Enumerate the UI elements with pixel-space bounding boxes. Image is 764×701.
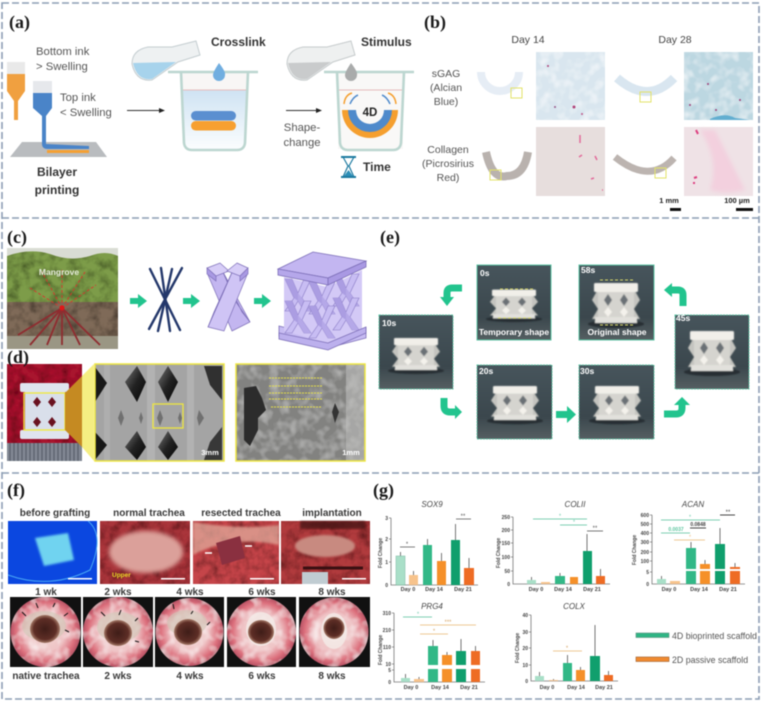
panel f label: (f) bbox=[7, 480, 25, 501]
frame 45s bbox=[675, 313, 749, 389]
chart ACAN: 600 bbox=[641, 513, 649, 519]
bottom ink text: Bottom ink bbox=[36, 46, 90, 58]
chart SOX9 bbox=[378, 500, 478, 593]
panel f: in vivo trachea bbox=[7, 480, 370, 682]
chart PRG4: PRG4 bbox=[421, 602, 443, 611]
arrow 10s to 20s bbox=[444, 398, 462, 419]
bilayer printing label bbox=[35, 165, 79, 197]
chart ACAN: 0 bbox=[646, 582, 649, 588]
column headings bbox=[20, 508, 362, 519]
chart COLII: Day 21 bbox=[583, 587, 601, 593]
chart ACAN: 200 bbox=[641, 550, 649, 556]
chart COLX: Day 14 bbox=[567, 685, 586, 691]
column headings: normal trachea bbox=[113, 508, 185, 519]
endoscopy native trachea bbox=[10, 597, 81, 667]
arrow 20s to 30s bbox=[556, 406, 576, 423]
magnified surface image bbox=[236, 364, 365, 461]
3D lattice scaffold bbox=[278, 252, 366, 350]
frame 0s bbox=[477, 265, 551, 340]
chart PRG4: Day 14 bbox=[431, 685, 450, 691]
hourglass icon bbox=[341, 157, 356, 177]
bottom ink text: > Swelling bbox=[36, 61, 88, 73]
chart COLII: 250 bbox=[502, 515, 510, 521]
chart PRG4 bbox=[378, 602, 485, 691]
frame 10s: 10s bbox=[382, 318, 396, 328]
100 um scale bar: 100 µm bbox=[724, 196, 750, 205]
week labels row 2: 6 wks bbox=[248, 671, 276, 682]
chart SOX9: Day 14 bbox=[425, 587, 444, 593]
chart SOX9: 2 bbox=[385, 537, 388, 543]
chart COLII: 150 bbox=[502, 541, 510, 547]
chart ACAN: 5 bbox=[646, 570, 649, 576]
panel e: shape recovery sequence bbox=[379, 227, 749, 439]
micro CT image: 3mm bbox=[201, 448, 219, 457]
arrow 1 bbox=[130, 294, 147, 308]
chart PRG4: *** bbox=[444, 620, 452, 626]
crosslink label: Crosslink bbox=[211, 35, 266, 49]
chart COLII: * bbox=[559, 514, 562, 520]
frame 58s: Original shape bbox=[587, 327, 647, 337]
frame 20s: 20s bbox=[479, 366, 493, 376]
grey liquid flask bbox=[287, 41, 355, 80]
week labels row 1: 2 wks bbox=[104, 587, 132, 598]
chart COLII: 100 bbox=[502, 555, 510, 561]
3D strut unit bbox=[207, 263, 250, 331]
frame 58s: 58s bbox=[581, 265, 595, 275]
endoscopy 4 wks bbox=[155, 597, 224, 667]
chart COLX: 20 bbox=[522, 646, 528, 652]
collagen row label: Collagen bbox=[427, 144, 469, 156]
photo normal trachea: Upper bbox=[112, 572, 131, 579]
arrow 0s to 10s bbox=[440, 288, 462, 306]
bilayer printing label: Bilayer bbox=[37, 165, 77, 179]
chart ACAN: Day 0 bbox=[662, 587, 676, 593]
week labels row 2: 4 wks bbox=[176, 671, 204, 682]
frame 45s: 45s bbox=[676, 313, 690, 323]
magnified surface image: 1mm bbox=[342, 448, 360, 457]
arrow to crosslink bbox=[127, 108, 165, 113]
legend 2D passive: 2D passive scaffold bbox=[672, 655, 748, 665]
panel g label: (g) bbox=[373, 480, 394, 501]
collagen row label: Red) bbox=[437, 172, 459, 184]
top ink text bbox=[60, 92, 112, 119]
chart COLII: Fold Change bbox=[496, 538, 502, 568]
crosslink droplet bbox=[213, 63, 225, 81]
sGAG day 28 micrograph bbox=[684, 52, 753, 120]
panel a label: (a) bbox=[9, 12, 30, 33]
chart PRG4: 5 bbox=[388, 668, 391, 674]
week labels row 1: 6 wks bbox=[248, 587, 276, 598]
chart SOX9: * bbox=[406, 542, 409, 548]
chart PRG4: Fold Change bbox=[378, 635, 384, 665]
day 28 heading: Day 28 bbox=[658, 34, 692, 46]
chart ACAN: Day 21 bbox=[719, 587, 737, 593]
week labels row 2: 8 wks bbox=[318, 671, 346, 682]
chart COLII: ** bbox=[593, 526, 598, 532]
week labels row 2: 2 wks bbox=[104, 671, 132, 682]
sGAG row label: sGAG bbox=[432, 68, 460, 80]
chart SOX9: 3 bbox=[385, 516, 388, 522]
panel e label: (e) bbox=[380, 227, 400, 248]
arrow 2 bbox=[183, 294, 200, 308]
photo normal trachea bbox=[100, 521, 190, 584]
panel c: mangrove inspired design bbox=[7, 227, 366, 350]
chart ACAN: 300 bbox=[641, 540, 649, 546]
collagen day 14 micrograph bbox=[536, 127, 605, 196]
chart SOX9: SOX9 bbox=[421, 500, 443, 509]
chart SOX9: 1 bbox=[385, 560, 388, 566]
chart ACAN: Day 14 bbox=[690, 587, 709, 593]
frame 0s: 0s bbox=[480, 268, 490, 278]
stimulus droplet bbox=[345, 63, 357, 81]
legend 4D bioprinted: 4D bioprinted scaffold bbox=[672, 631, 757, 641]
branching rod icon bbox=[149, 268, 182, 331]
sGAG row label: (Alcian bbox=[430, 82, 462, 94]
chart SOX9: Day 21 bbox=[454, 587, 472, 593]
arrow 30s to 45s bbox=[664, 397, 690, 414]
micro CT image bbox=[95, 364, 224, 461]
chart ACAN: 0.0848 bbox=[690, 522, 706, 528]
chart COLX: 10 bbox=[522, 663, 528, 669]
chart COLX: Day 0 bbox=[540, 685, 554, 691]
100 um scale bar bbox=[724, 196, 753, 211]
chart PRG4: * bbox=[417, 612, 420, 618]
chart PRG4: Day 21 bbox=[460, 685, 478, 691]
top ink text: Top ink bbox=[60, 92, 96, 104]
frame 30s: 30s bbox=[580, 366, 594, 376]
zoom wedge bbox=[65, 364, 94, 461]
chart ACAN bbox=[632, 500, 745, 593]
chart PRG4: 0 bbox=[388, 680, 391, 686]
frame 10s bbox=[379, 315, 453, 389]
endoscopy 2 wks bbox=[83, 597, 153, 667]
print platform bbox=[10, 142, 107, 157]
column headings: implantation bbox=[302, 508, 362, 519]
orange ink syringe bbox=[7, 62, 25, 120]
chart COLX: COLX bbox=[563, 602, 586, 611]
photo implantation bbox=[281, 521, 370, 584]
column headings: before grafting bbox=[20, 508, 90, 519]
endoscopy 6 wks bbox=[227, 597, 296, 667]
chart COLII: Day 0 bbox=[529, 587, 543, 593]
panel g: gene expression charts bbox=[373, 480, 757, 691]
frame 0s: Temporary shape bbox=[479, 327, 549, 337]
sGAG row label: Blue) bbox=[434, 96, 458, 108]
chart SOX9: Day 0 bbox=[401, 587, 415, 593]
collagen day 14 arc bbox=[486, 152, 528, 180]
sGAG row label bbox=[430, 68, 462, 108]
chart ACAN: * bbox=[689, 535, 692, 541]
chart ACAN: * bbox=[689, 515, 692, 521]
stimulus label: Stimulus bbox=[361, 35, 412, 49]
chart ACAN: 0.0037 bbox=[668, 527, 684, 533]
chart COLII: COLII bbox=[565, 500, 586, 509]
chart COLII: 0 bbox=[507, 582, 510, 588]
panel b: histology bbox=[422, 12, 753, 211]
chart PRG4: 310 bbox=[383, 611, 391, 617]
chart COLX: Day 21 bbox=[595, 685, 613, 691]
column headings: resected trachea bbox=[201, 508, 281, 519]
chart COLX: Fold Change bbox=[515, 633, 521, 663]
chart COLII: 200 bbox=[502, 528, 510, 534]
week labels row 1: 4 wks bbox=[176, 587, 204, 598]
chart PRG4: Day 0 bbox=[404, 685, 418, 691]
panel d label: (d) bbox=[7, 347, 29, 368]
blue liquid flask bbox=[132, 41, 200, 80]
week labels row 1: 1 wk bbox=[35, 587, 57, 598]
crosslink beaker bbox=[168, 72, 258, 150]
sGAG day 28 arc bbox=[617, 78, 674, 102]
chart PRG4: * bbox=[433, 629, 436, 635]
week labels row 2: native trachea bbox=[12, 671, 80, 682]
chart PRG4: 210 bbox=[383, 628, 391, 634]
chart COLX: 40 bbox=[522, 613, 528, 619]
chart ACAN: 500 bbox=[641, 522, 649, 528]
frame 20s bbox=[477, 365, 552, 439]
1 mm scale bar: 1 mm bbox=[659, 196, 679, 205]
panel b label: (b) bbox=[424, 12, 446, 33]
chart ACAN: Fold Change bbox=[632, 535, 638, 565]
shape-change label bbox=[283, 122, 321, 149]
legend bbox=[636, 631, 757, 665]
stimulus beaker with 4D ring bbox=[324, 72, 414, 150]
chart COLII: 50 bbox=[504, 569, 510, 575]
collagen row label: (Picrosirius bbox=[422, 158, 474, 170]
chart COLII: * bbox=[573, 520, 576, 526]
panel c label: (c) bbox=[7, 227, 27, 248]
mangrove photo: Mangrove bbox=[39, 267, 79, 277]
chart COLII: Day 14 bbox=[554, 587, 573, 593]
time label: Time bbox=[363, 160, 391, 174]
chart SOX9: ** bbox=[461, 514, 466, 520]
arrow 3 bbox=[254, 294, 271, 308]
arrow 45s to 58s bbox=[664, 283, 683, 306]
chart SOX9: 0 bbox=[385, 583, 388, 589]
printed scaffold photo bbox=[7, 364, 82, 461]
chart COLX: * bbox=[566, 646, 569, 652]
chart ACAN: 400 bbox=[641, 531, 649, 537]
chart COLX: 30 bbox=[522, 630, 528, 636]
frame 58s bbox=[579, 265, 654, 340]
chart COLX: 0 bbox=[525, 679, 528, 685]
collagen day 28 micrograph bbox=[684, 127, 753, 196]
chart COLX bbox=[515, 602, 618, 691]
chart SOX9: Fold Change bbox=[378, 538, 384, 568]
chart PRG4: 10 bbox=[385, 662, 391, 668]
photo before grafting bbox=[8, 521, 97, 584]
chart PRG4: 110 bbox=[383, 645, 391, 651]
top ink text: < Swelling bbox=[60, 107, 112, 119]
collagen row label bbox=[422, 144, 474, 184]
blue ink syringe and printed line bbox=[33, 81, 89, 153]
photo resected trachea bbox=[193, 521, 279, 584]
week labels row 1 bbox=[35, 587, 346, 598]
week labels row 1: 8 wks bbox=[318, 587, 346, 598]
frame 30s bbox=[579, 365, 654, 439]
stimulus beaker with 4D ring: 4D bbox=[363, 107, 377, 119]
chart ACAN: ACAN bbox=[681, 500, 704, 509]
panel a: bilayer printing and shape change bbox=[7, 12, 414, 197]
sGAG day 14 arc bbox=[481, 72, 522, 98]
mangrove photo bbox=[7, 248, 118, 349]
1 mm scale bar bbox=[659, 196, 681, 211]
endoscopy 8 wks bbox=[299, 597, 370, 667]
week labels row 2 bbox=[12, 671, 346, 682]
panel d: printed scaffold imaging bbox=[7, 347, 365, 461]
chart ACAN: ** bbox=[726, 510, 731, 516]
bilayer printing label: printing bbox=[35, 183, 79, 197]
shape-change label: change bbox=[283, 137, 321, 149]
shape-change label: Shape- bbox=[284, 122, 320, 134]
collagen day 28 arc bbox=[615, 157, 674, 178]
chart COLII bbox=[496, 500, 610, 593]
arrow to stimulus bbox=[286, 108, 322, 113]
chart ACAN: 100 bbox=[641, 559, 649, 565]
bottom ink text bbox=[36, 46, 90, 73]
sGAG day 14 micrograph bbox=[536, 52, 605, 120]
day 14 heading: Day 14 bbox=[511, 34, 545, 46]
